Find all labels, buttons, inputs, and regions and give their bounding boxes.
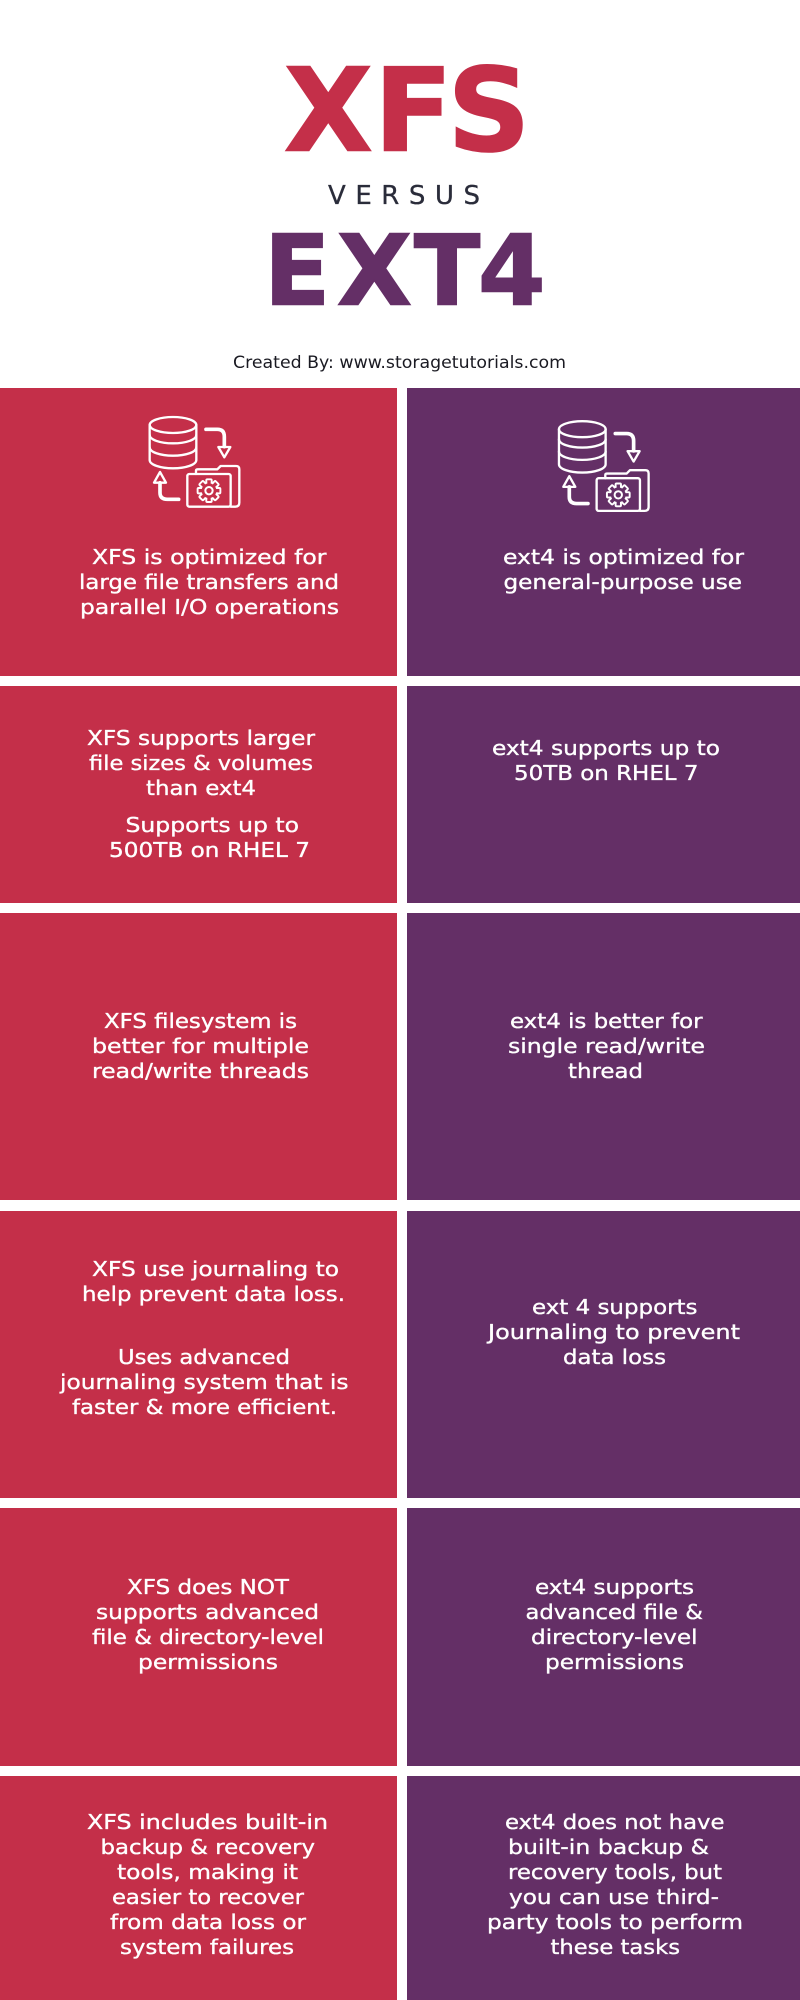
text: XFS threads: better for multiple (92, 1034, 309, 1058)
panel: ext4 capacity (407, 686, 800, 903)
text: ext4 backup: built-in backup & (508, 1835, 709, 1859)
text: ext4 permissions: directory-level (531, 1625, 698, 1649)
text: XFS optimization: large file transfers and (79, 570, 339, 594)
text: ext4 backup: you can use third- (509, 1885, 719, 1909)
credit line: Created By: www.storagetutorials.com (233, 353, 566, 372)
text: XFS optimization: XFS is optimized for (92, 545, 327, 569)
panel: XFS optimization (0, 388, 397, 676)
text: ext4 journaling: data loss (563, 1345, 666, 1369)
text: XFS journaling: help prevent data loss. (82, 1282, 345, 1306)
text: XFS threads: read/write threads (92, 1059, 309, 1083)
panel: XFS capacity (0, 686, 397, 903)
panel: XFS threads (0, 913, 397, 1200)
text: XFS journaling: XFS use journaling to (92, 1257, 339, 1281)
text: XFS permissions: XFS does NOT (127, 1575, 290, 1599)
text: ext4 backup: recovery tools, but (508, 1860, 722, 1884)
text: XFS backup (87, 1810, 328, 1959)
text: XFS threads (92, 1009, 309, 1083)
icon: database and folder cycle (559, 421, 649, 511)
text: XFS backup: backup & recovery (100, 1835, 315, 1859)
text: XFS threads: XFS filesystem is (104, 1009, 297, 1033)
panel: ext4 backup (407, 1776, 800, 2000)
text: XFS permissions: supports advanced (96, 1600, 319, 1624)
text: XFS backup: from data loss or (110, 1910, 307, 1934)
text: ext4 threads: ext4 is better for (510, 1009, 703, 1033)
text: ext4 permissions: permissions (545, 1650, 684, 1674)
text: XFS capacity: file sizes & volumes (89, 751, 313, 775)
text: ext4 permissions: advanced file & (526, 1600, 703, 1624)
text: XFS permissions: permissions (138, 1650, 278, 1674)
text: XFS capacity: XFS supports larger (87, 726, 316, 750)
text: ext4 capacity: ext4 supports up to (492, 736, 720, 760)
panel: ext4 journaling (407, 1211, 800, 1498)
text: XFS permissions (92, 1575, 324, 1674)
text: ext4 backup: party tools to perform (487, 1910, 743, 1934)
text: ext4 permissions (526, 1575, 703, 1674)
panel: ext4 threads (407, 913, 800, 1200)
text: ext4 optimization: general-purpose use (504, 570, 742, 594)
panel: XFS backup (0, 1776, 397, 2000)
text: XFS backup: XFS includes built-in (87, 1810, 328, 1834)
text: XFS journaling (59, 1257, 348, 1419)
title: EXT4: EXT4 (264, 214, 546, 328)
panel: ext4 permissions (407, 1508, 800, 1766)
text: XFS permissions: file & directory-level (92, 1625, 324, 1649)
text: ext4 threads (508, 1009, 705, 1083)
panel: XFS journaling (0, 1211, 397, 1498)
text: ext4 optimization: ext4 is optimized for (503, 545, 745, 569)
text: ext4 journaling: ext 4 supports (532, 1295, 698, 1319)
text: ext4 threads: single read/write (508, 1034, 705, 1058)
text: XFS capacity (87, 726, 316, 862)
text: ext4 permissions: ext4 supports (535, 1575, 694, 1599)
text: ext4 backup: ext4 does not have (505, 1810, 724, 1834)
text: XFS optimization: parallel I/O operations (80, 595, 339, 619)
text: XFS journaling: Uses advanced (118, 1345, 290, 1369)
panel: ext4 optimization (407, 388, 800, 676)
text: ext4 capacity (492, 736, 720, 785)
text: XFS backup: tools, making it (117, 1860, 298, 1884)
text: ext4 backup: these tasks (550, 1935, 680, 1959)
text: XFS journaling: faster & more efficient. (72, 1395, 337, 1419)
text: XFS backup: easier to recover (112, 1885, 305, 1909)
text: XFS backup: system failures (120, 1935, 294, 1959)
title: XFS: XFS (284, 44, 530, 178)
heading: VERSUS: VERSUS (328, 181, 480, 211)
text: ext4 threads: thread (568, 1059, 643, 1083)
text: XFS optimization (79, 545, 339, 619)
text: XFS journaling: journaling system that is (59, 1370, 348, 1394)
text: ext4 journaling: Journaling to prevent (486, 1320, 740, 1344)
text: XFS capacity: Supports up to (126, 813, 299, 837)
text: ext4 optimization (503, 545, 745, 594)
text: ext4 capacity: 50TB on RHEL 7 (514, 761, 698, 785)
text: XFS capacity: 500TB on RHEL 7 (109, 838, 310, 862)
text: ext4 journaling (486, 1295, 740, 1369)
icon: database and folder cycle (150, 417, 239, 507)
text: ext4 backup (487, 1810, 743, 1959)
panel: XFS permissions (0, 1508, 397, 1766)
text: XFS capacity: than ext4 (146, 776, 256, 800)
